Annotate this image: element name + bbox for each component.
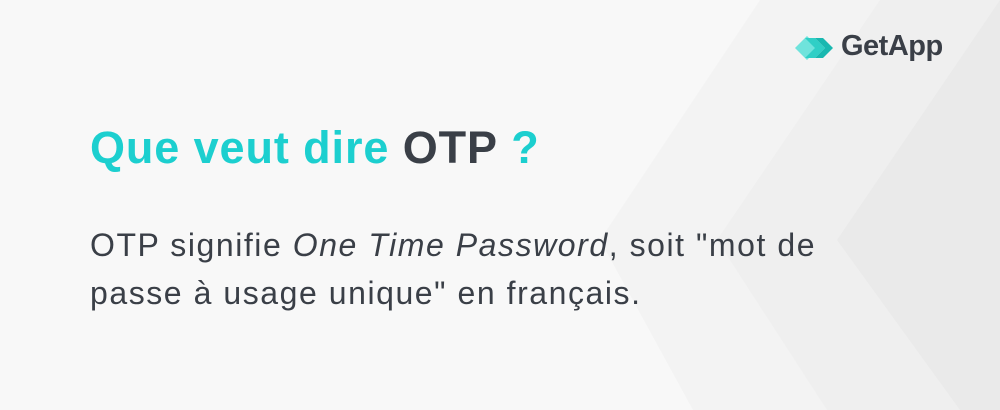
body text: OTP signifie One Time Password, soit "mot de xyxy=(90,227,816,263)
logo xyxy=(795,30,943,62)
icon: logo chevrons xyxy=(795,36,833,60)
logo text: GetApp xyxy=(841,30,943,62)
body text xyxy=(90,227,816,311)
body text: passe à usage unique" en français. xyxy=(90,275,642,311)
title: Que veut dire OTP ? xyxy=(90,122,540,173)
